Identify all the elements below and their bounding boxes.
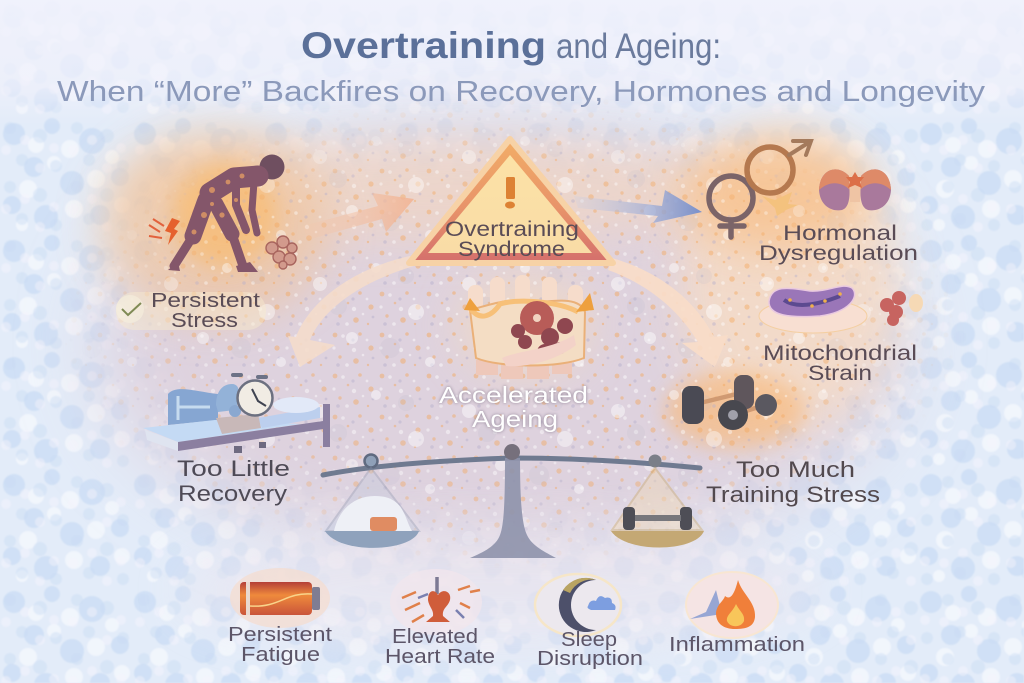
icon: flame xyxy=(686,572,778,638)
label: accelerated ageing: Accelerated xyxy=(439,382,588,408)
left pan: rest xyxy=(325,468,419,548)
arrow: stress to syndrome xyxy=(303,193,414,240)
icon: exclamation mark xyxy=(505,177,515,208)
icon: hormonal symbols xyxy=(709,141,891,237)
label: mitochondrial strain xyxy=(763,342,917,385)
label: sleep disruption: Disruption xyxy=(537,648,643,670)
icon: mitochondrion xyxy=(759,286,923,333)
icon: heart xyxy=(390,569,482,635)
icon: moon and clouds xyxy=(535,574,621,636)
icon: dumbbells xyxy=(682,375,777,430)
label: sleep disruption xyxy=(537,629,643,670)
icon: accelerated ageing cluster xyxy=(464,275,594,379)
warning triangle: overtraining syndrome xyxy=(409,139,613,263)
title: Overtraining xyxy=(301,25,546,66)
label: persistent stress: Persistent xyxy=(151,289,260,312)
label: too much training stress xyxy=(706,457,880,507)
arrow: syndrome to recovery xyxy=(288,256,414,367)
figure: persistent stress xyxy=(149,154,297,272)
label: mitochondrial strain: Mitochondrial xyxy=(763,342,917,365)
label: accelerated ageing: Ageing xyxy=(472,406,558,432)
title: When “More” Backfires on Recovery, Hormones and Longevity xyxy=(57,76,986,108)
label: persistent stress xyxy=(116,289,266,332)
label: elevated heart rate: Heart Rate xyxy=(385,646,495,668)
label: hormonal dysregulation xyxy=(759,221,918,265)
label: hormonal dysregulation: Hormonal xyxy=(783,221,897,245)
label: persistent fatigue: Fatigue xyxy=(241,644,320,666)
icon: battery xyxy=(230,568,330,628)
arrow: syndrome to hormones xyxy=(574,190,702,223)
label: too little recovery: Recovery xyxy=(178,481,287,506)
label: elevated heart rate xyxy=(385,626,495,668)
label: sleep disruption: Sleep xyxy=(561,629,617,651)
icon: pain burst xyxy=(149,218,180,245)
icon: glands xyxy=(819,169,891,210)
label: persistent fatigue: Persistent xyxy=(228,624,333,646)
label: overtraining syndrome: Overtraining xyxy=(445,218,579,241)
label: mitochondrial strain: Strain xyxy=(808,362,872,385)
right pan: dumbbell xyxy=(611,468,704,548)
label: persistent stress: Stress xyxy=(171,309,238,332)
label: too little recovery xyxy=(177,456,290,506)
label: persistent fatigue xyxy=(228,624,333,666)
icon: cells xyxy=(266,236,297,269)
arrow: syndrome to mitochondrial strain xyxy=(608,258,728,367)
label: overtraining syndrome xyxy=(445,218,579,261)
label: too much training stress: Training Stress xyxy=(706,482,880,507)
label: inflammation: Inflammation xyxy=(669,633,805,656)
label: hormonal dysregulation: Dysregulation xyxy=(759,241,918,265)
label: accelerated ageing xyxy=(439,382,588,432)
label: elevated heart rate: Elevated xyxy=(392,626,478,648)
label: overtraining syndrome: Syndrome xyxy=(458,238,565,261)
label: too much training stress: Too Much xyxy=(736,457,855,482)
label: too little recovery: Too Little xyxy=(177,456,290,481)
title xyxy=(57,25,986,108)
icon: bed and alarm clock xyxy=(143,375,330,453)
title: and Ageing: xyxy=(556,27,721,66)
balance scale xyxy=(323,444,704,558)
